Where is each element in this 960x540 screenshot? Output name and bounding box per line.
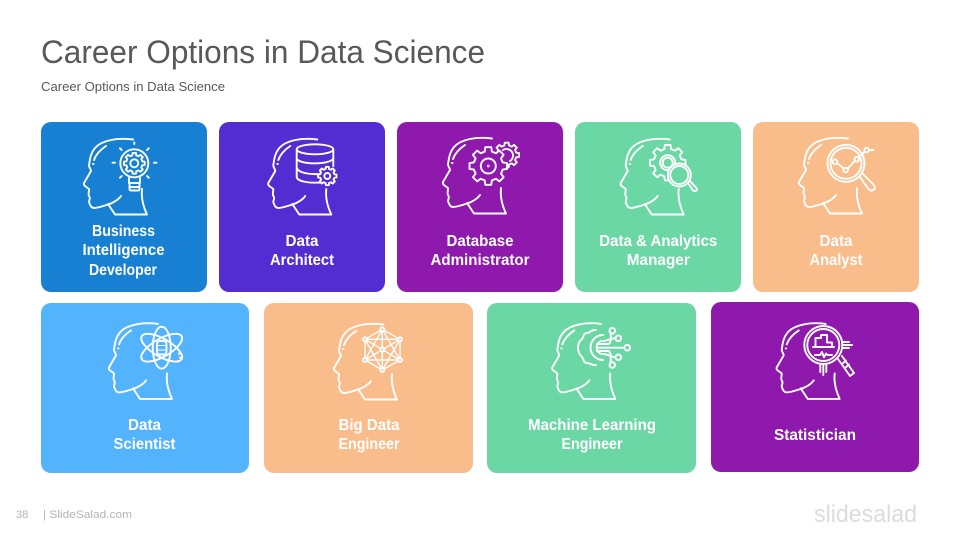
label: Intelligence xyxy=(82,242,165,259)
label: Administrator xyxy=(430,252,530,269)
icon: head with atom and database xyxy=(109,323,186,399)
label: Data xyxy=(286,233,319,250)
label xyxy=(528,417,656,453)
label: Developer xyxy=(89,262,157,279)
icon: head with two gears xyxy=(443,138,519,214)
label: Statistician xyxy=(774,427,856,444)
panel: Data Analyst xyxy=(753,122,919,292)
panel: Database Administrator xyxy=(397,122,563,292)
label: Business xyxy=(92,223,155,240)
icon: head with gear and magnifier xyxy=(621,139,697,214)
label: Machine Learning xyxy=(528,417,656,434)
label: Engineer xyxy=(562,436,622,453)
label: Architect xyxy=(270,252,334,269)
label: Analyst xyxy=(810,252,862,269)
panel: Machine Learning Engineer xyxy=(487,303,696,473)
label: Manager xyxy=(627,252,690,269)
title: Career Options in Data Science xyxy=(41,34,485,70)
icon: head with network graph xyxy=(334,324,402,400)
label xyxy=(810,233,862,269)
label: Engineer xyxy=(338,436,400,453)
label xyxy=(270,233,334,269)
label: Data xyxy=(820,233,853,250)
icon: head with magnifier and bar chart xyxy=(777,323,854,399)
label: Database xyxy=(446,233,514,250)
subtitle: Career Options in Data Science xyxy=(41,80,225,94)
footer: page number: 38 xyxy=(16,509,28,521)
panel: Business Intelligence Developer xyxy=(41,122,207,292)
label xyxy=(338,417,400,453)
panel: Statistician xyxy=(711,302,919,472)
label: Big Data xyxy=(338,417,400,434)
panel: Data Architect xyxy=(219,122,385,292)
label: Data xyxy=(128,417,161,434)
label xyxy=(114,417,176,453)
footer: site name: | SlideSalad.com xyxy=(43,509,132,521)
label xyxy=(430,233,530,269)
label xyxy=(82,223,165,279)
icon: head with database and gear xyxy=(268,139,336,214)
label xyxy=(599,233,717,269)
icon: head with light bulb gear xyxy=(84,139,156,214)
footer: logo: slidesalad xyxy=(814,501,917,528)
panel: Data & Analytics Manager xyxy=(575,122,741,292)
label: Scientist xyxy=(114,436,176,453)
icon: head with circuit brain xyxy=(552,323,630,399)
icon: head with magnifier and line chart xyxy=(799,138,875,214)
panel: Data Scientist xyxy=(41,303,249,473)
panel: Big Data Engineer xyxy=(264,303,473,473)
label: Data & Analytics xyxy=(599,233,717,250)
